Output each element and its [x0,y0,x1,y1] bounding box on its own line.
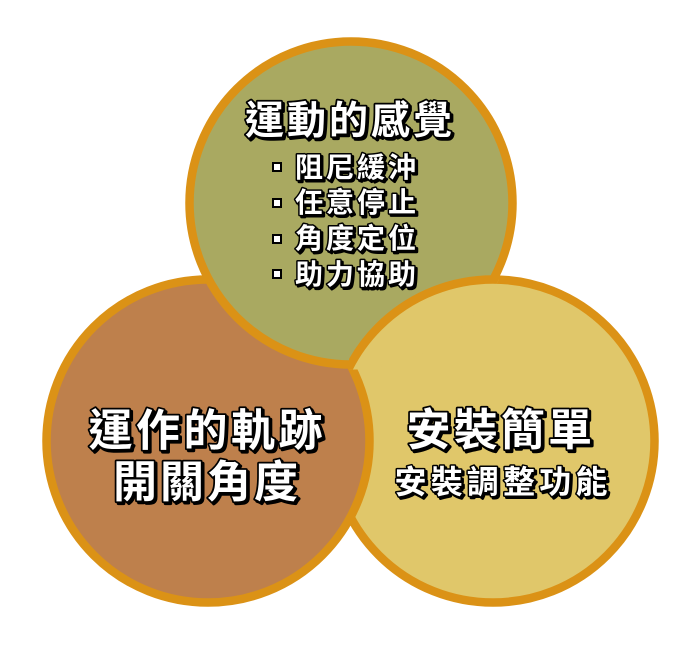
text block: motion feel [245,100,455,290]
heading: motion feel: 運動的感覺 [245,100,455,143]
list item 4: 助力協助 [295,259,419,290]
list item 2: 任意停止 [295,187,419,218]
text block: install [394,406,612,500]
circle: trajectory (brown) [46,280,370,602]
list: motion features [273,152,419,290]
circle overlap: yellow over olive [349,275,500,370]
list item 1: 阻尼緩沖 [295,152,419,183]
list item 3: 角度定位 [295,222,419,254]
circle: motion feel (olive) [190,42,512,364]
heading line 1: 運作的軌跡 [88,406,326,456]
heading: easy install: 安裝簡單 [406,406,595,455]
text block: trajectory [88,406,326,507]
subheading: install adjustment: 安裝調整功能 [394,464,612,500]
heading line 2: 開關角度 [113,458,301,507]
circle: install (yellow) [332,280,654,602]
